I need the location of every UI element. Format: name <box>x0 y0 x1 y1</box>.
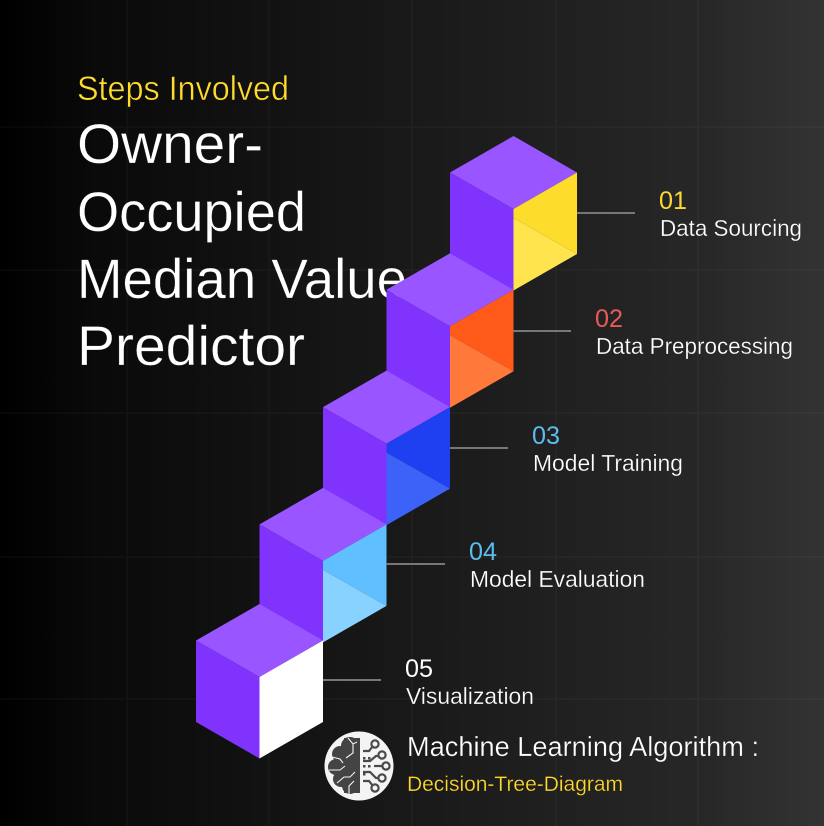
title <box>77 112 407 377</box>
step 04 label: Model Evaluation <box>470 566 645 592</box>
step 02 label: 02 <box>595 305 623 333</box>
step 05 label: 05 <box>405 655 433 683</box>
cube 03: blue <box>323 371 450 525</box>
step 02 label <box>513 305 793 359</box>
step 05 label <box>323 655 534 709</box>
step 03 label <box>450 422 683 476</box>
cube 04: light blue <box>260 488 386 642</box>
footer: algorithm name: Decision-Tree-Diagram <box>407 772 623 796</box>
step 04 label: 04 <box>469 538 497 566</box>
title: Predictor <box>77 314 305 377</box>
step 05 label: Visualization <box>406 683 534 709</box>
step 01 label: 01 <box>659 187 687 215</box>
footer: algorithm heading: Machine Learning Algorithm : <box>407 731 759 762</box>
title: Median Value <box>77 247 407 310</box>
step 02 label: Data Preprocessing <box>596 333 793 359</box>
cube 05: white <box>196 604 323 758</box>
title: Occupied <box>77 180 306 243</box>
step 01 label: Data Sourcing <box>660 215 802 241</box>
step 03 label: Model Training <box>533 450 683 476</box>
cube staircase <box>196 136 577 758</box>
step 04 label <box>386 538 645 592</box>
step 01 label <box>577 187 802 241</box>
heading: steps involved: Steps Involved <box>77 70 289 108</box>
title: Owner- <box>77 112 263 175</box>
cube 01: yellow <box>450 136 577 290</box>
icon: brain and circuit <box>324 732 394 800</box>
step 03 label: 03 <box>532 422 560 450</box>
cube 02: orange <box>386 253 514 408</box>
